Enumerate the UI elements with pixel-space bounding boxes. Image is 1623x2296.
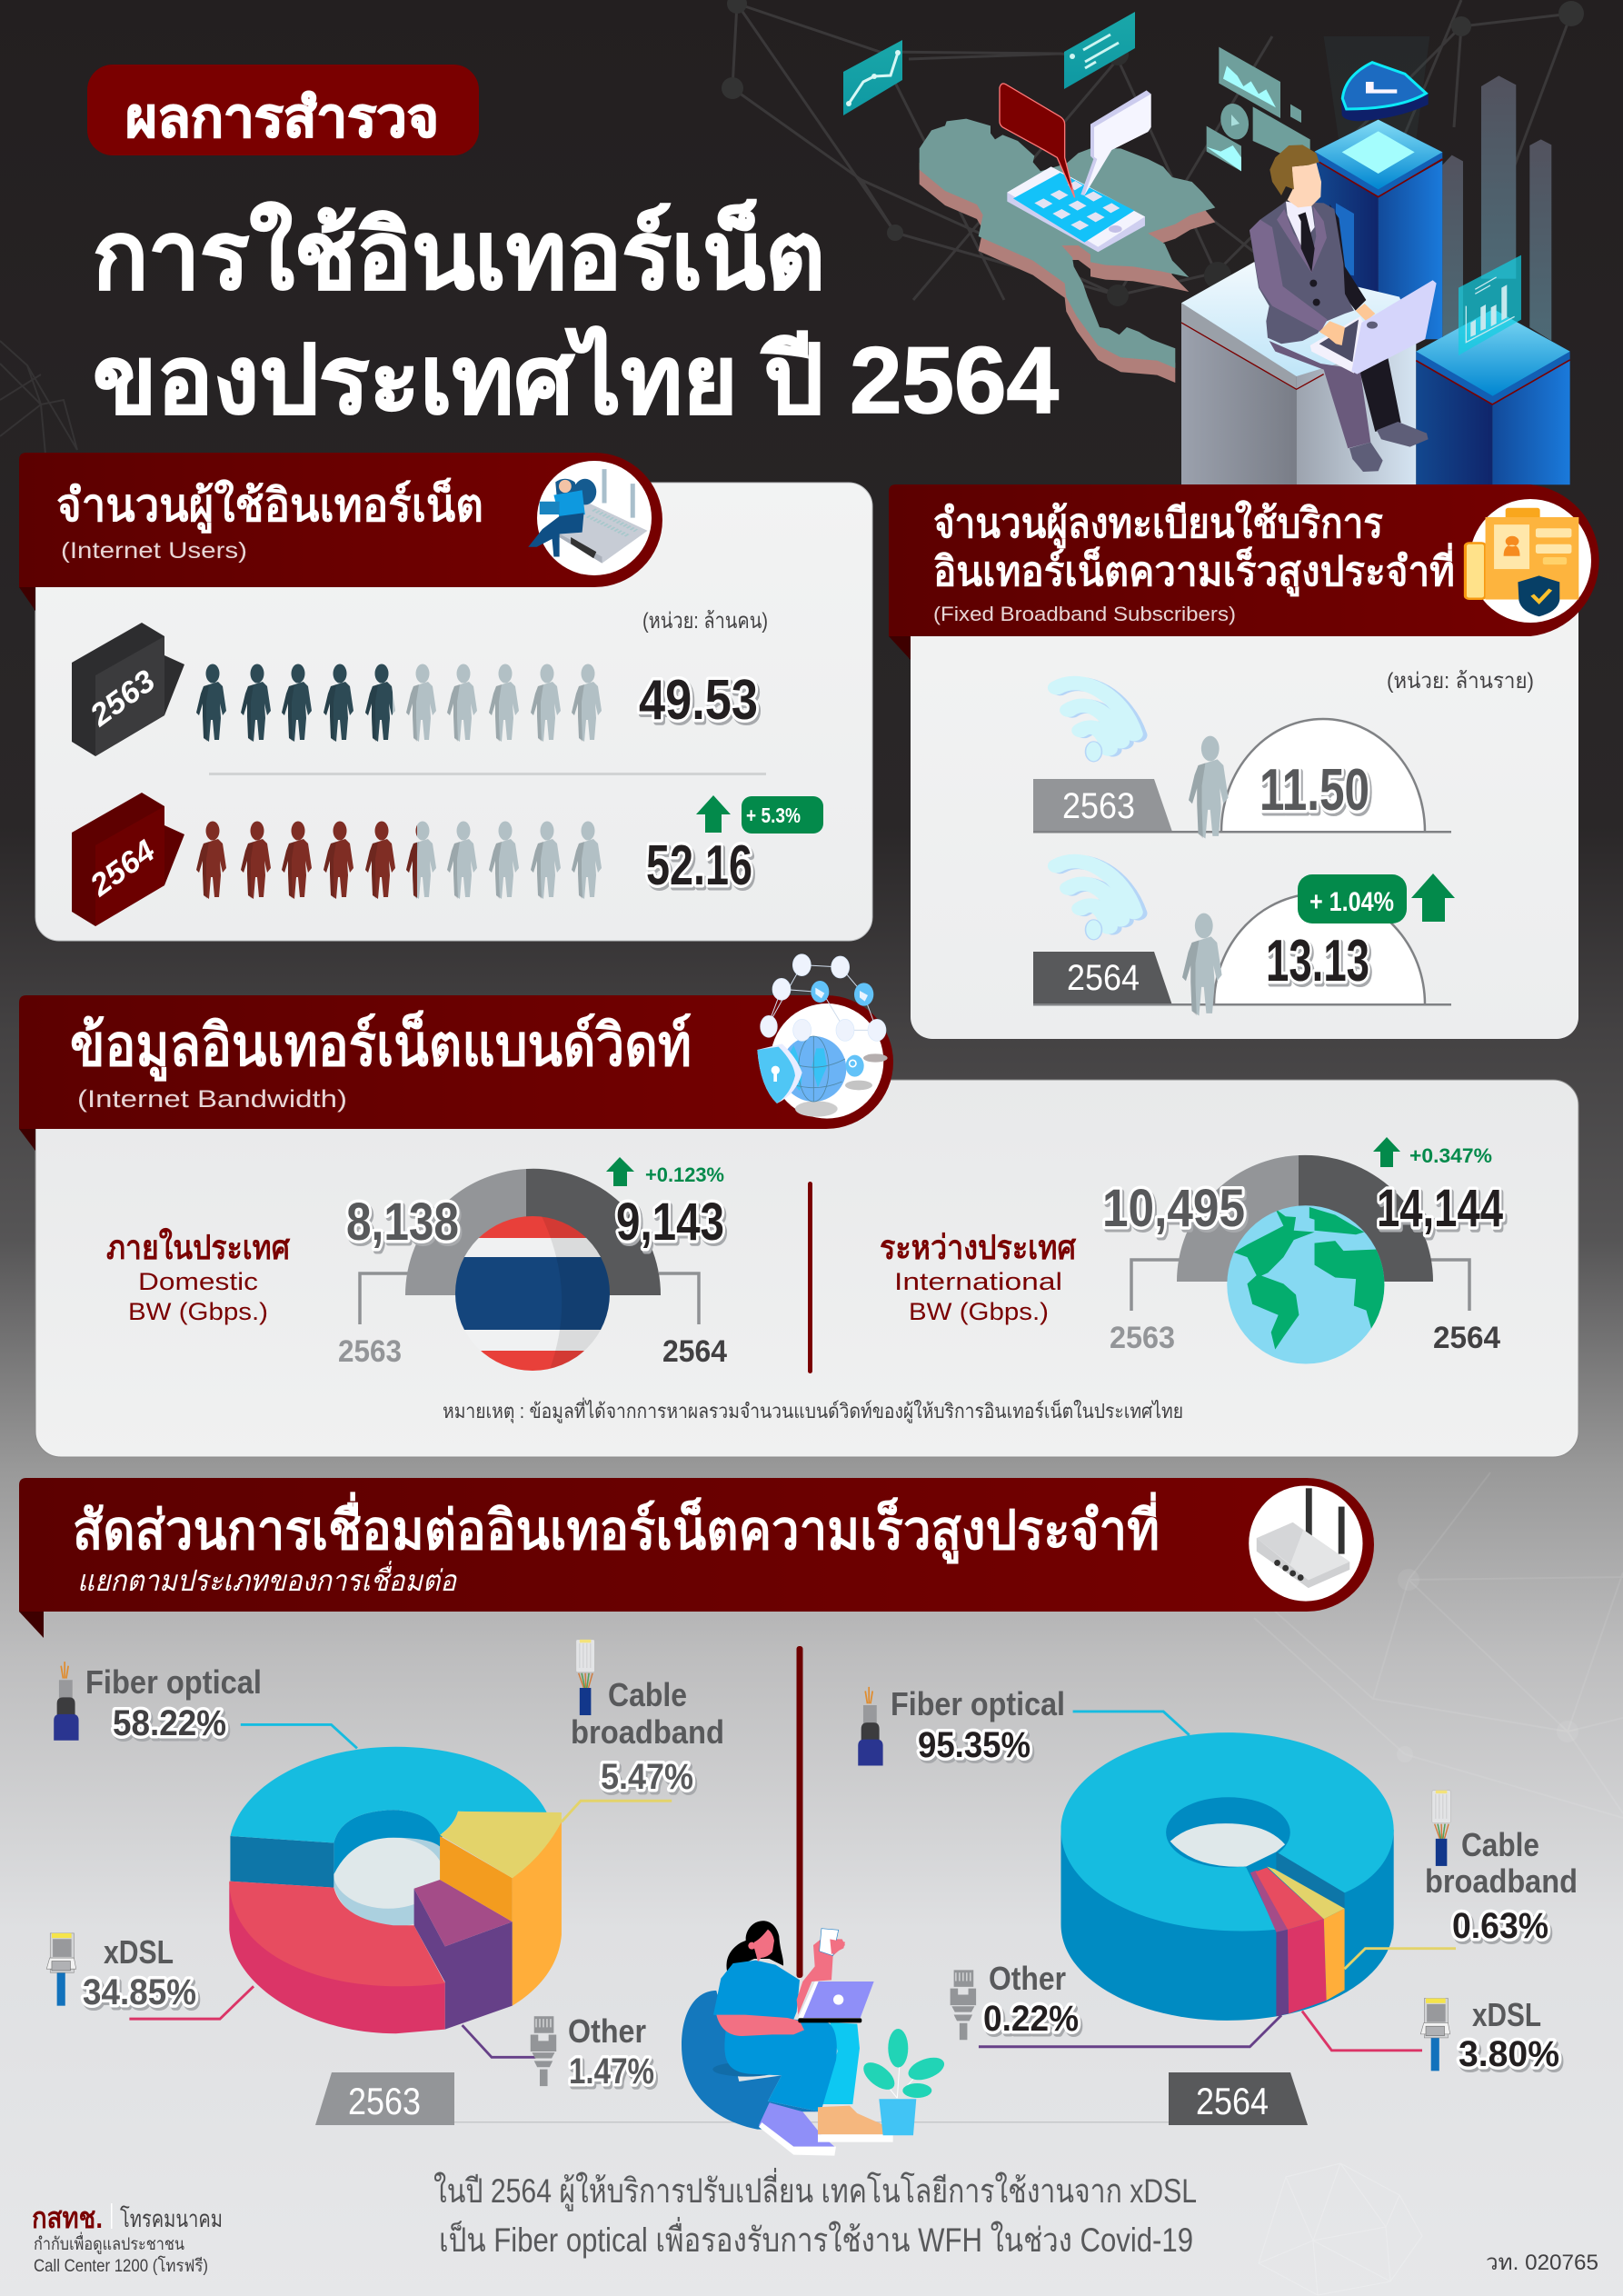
icon: floating text panel	[1064, 12, 1135, 89]
icon: floating media panels	[1207, 47, 1310, 171]
face	[754, 1930, 774, 1962]
year labels international	[1110, 1321, 1500, 1355]
slice: Fiber optical 58.22%	[230, 1747, 548, 1888]
icon: registration form	[1465, 499, 1591, 623]
label: other 2564: Other	[989, 1960, 1066, 1997]
label: other 2563	[531, 2012, 654, 2091]
year tag 2564: 2564	[1067, 958, 1140, 998]
ground line	[454, 2121, 1172, 2123]
label: fiber 2564: Fiber optical	[891, 1685, 1065, 1722]
torso and lap	[713, 1961, 837, 2111]
icon: earth globe	[1221, 1204, 1392, 1365]
label: fiber 2564	[858, 1685, 1065, 1766]
arrow up	[696, 795, 731, 833]
icon: smartphone	[1007, 166, 1145, 252]
value 14,144: 14,144	[1377, 1179, 1503, 1238]
year tag 2564	[1169, 2072, 1308, 2125]
network sphere: bottom right	[1259, 2163, 1422, 2295]
brackets international	[1131, 1260, 1469, 1311]
panel: internet users	[19, 453, 872, 941]
header ribbon: แยกตามประเภทของการเชื่อมต่อ	[77, 1561, 458, 1597]
slice: xDSL 3.80%	[1256, 1868, 1327, 2013]
label: cable 2563	[571, 1640, 724, 1797]
card	[35, 1080, 1578, 1457]
header ribbon: (Fixed Broadband Subscribers)	[933, 603, 1236, 625]
shoe right	[818, 2106, 893, 2134]
divider	[808, 1182, 812, 1373]
chart: 3D donut 2563	[229, 1747, 562, 2033]
slice: Cable broadband 0.63%	[1267, 1867, 1345, 2001]
label: cable 2564: broadband	[1425, 1862, 1578, 1900]
value 9,143: 9,143	[616, 1193, 724, 1252]
domestic label: ภายในประเทศ	[106, 1227, 290, 1266]
title: ของประเทศไทย ปี 2564	[93, 326, 1059, 434]
label: cable 2564	[1425, 1791, 1578, 1946]
label: xDSL 2563: xDSL	[104, 1933, 174, 1971]
label: cable 2563: 5.47%	[601, 1757, 693, 1797]
half dome 2564	[1214, 893, 1425, 1004]
brackets domestic	[360, 1273, 699, 1324]
icon: beanbag	[682, 1991, 821, 2130]
woman with laptop illustration	[682, 1921, 947, 2156]
badge: survey results	[87, 65, 479, 155]
label: cable 2564: 0.63%	[1452, 1906, 1548, 1946]
year labels international: 2564	[1433, 1321, 1500, 1355]
badge: survey results: ผลการสำรวจ	[125, 87, 439, 148]
year tag 2563	[315, 2072, 454, 2125]
value 2563: 49.53	[639, 669, 758, 732]
label: other 2564: 0.22%	[983, 1999, 1079, 2039]
year block 2564	[72, 793, 184, 926]
year labels domestic: 2564	[662, 1334, 727, 1369]
laptop	[798, 1982, 874, 2018]
icon: wifi 2563	[1057, 684, 1138, 762]
logo: NBTC: กสทช.	[32, 2201, 103, 2234]
label: cable 2563: Cable	[608, 1676, 687, 1713]
header ribbon	[19, 453, 662, 587]
white platform	[1181, 262, 1416, 484]
icon: white speech bubble	[1080, 90, 1151, 195]
panel: internet bandwidth	[19, 954, 1578, 1457]
ribbon fold	[19, 1129, 35, 1151]
value 8,138: 8,138	[346, 1193, 459, 1252]
hole	[1166, 1797, 1290, 1868]
header ribbon: จำนวนผู้ใช้อินเทอร์เน็ต	[56, 477, 483, 534]
header ribbon: (Internet Users)	[61, 538, 247, 564]
badge +1.04%	[1298, 874, 1407, 923]
plant	[879, 2099, 916, 2135]
label: fiber 2563: 58.22%	[113, 1703, 226, 1743]
header ribbon: อินเทอร์เน็ตความเร็วสูงประจำที่	[933, 543, 1455, 597]
unit label: (หน่วย: ล้านราย)	[1387, 669, 1534, 694]
card	[35, 483, 872, 941]
year labels international: 2563	[1110, 1321, 1175, 1355]
label: xDSL 2564: xDSL	[1472, 1996, 1541, 2033]
icon: shield	[1324, 36, 1429, 152]
label: xDSL 2564	[1420, 1996, 1559, 2074]
pictogram row 2563: 4.95 of 10	[196, 664, 602, 742]
year block 2564: 2564	[84, 834, 162, 903]
year tag 2564	[1033, 952, 1172, 1005]
divider	[209, 773, 766, 775]
half dome chart international	[1177, 1155, 1433, 1282]
conclusion text	[433, 2167, 1197, 2259]
year block 2563: 2563	[84, 664, 162, 734]
domestic label: BW (Gbps.)	[128, 1298, 268, 1325]
businessman with laptop	[1250, 145, 1437, 472]
label: cable 2564: Cable	[1461, 1826, 1539, 1863]
network background: lower right	[1254, 1472, 1623, 1818]
year tag 2563	[1033, 779, 1172, 832]
icon: woman on router	[528, 461, 652, 575]
domestic label	[106, 1227, 290, 1325]
logo: NBTC: โทรคมนาคม	[120, 2205, 223, 2232]
card	[911, 582, 1578, 1039]
slice: Other 1.47%	[414, 1880, 513, 2030]
pictogram row 2564: 5.2 of 10	[196, 822, 602, 899]
title: การใช้อินเทอร์เน็ต	[93, 198, 825, 309]
domestic label: Domestic	[138, 1268, 258, 1295]
phone	[820, 1929, 839, 1956]
network background: top right	[722, 0, 1584, 336]
label: fiber 2564: 95.35%	[918, 1725, 1031, 1765]
label: fiber 2563: Fiber optical	[85, 1663, 262, 1701]
arrow up	[606, 1157, 634, 1186]
ribbon fold	[19, 587, 35, 611]
divider	[796, 1646, 803, 1978]
half dome chart domestic	[405, 1169, 661, 1295]
year tag 2563: 2563	[1062, 786, 1135, 826]
year tag 2563: 2563	[348, 2080, 421, 2122]
label: xDSL 2563	[46, 1933, 196, 2012]
ribbon fold	[19, 1612, 44, 1638]
logo: NBTC	[32, 2201, 223, 2276]
badge +1.04%: + 1.04%	[1309, 887, 1394, 917]
title	[93, 198, 1059, 434]
leader lines 2563	[129, 1724, 672, 2057]
value 10,495: 10,495	[1102, 1179, 1245, 1238]
icon: floating chart panel	[843, 40, 902, 115]
icon: red speech bubble	[1000, 84, 1075, 197]
logo: NBTC: Call Center 1200 (โทรฟรี)	[34, 2255, 208, 2276]
baseline 2563	[1033, 831, 1451, 833]
header ribbon: (Internet Bandwidth)	[77, 1085, 347, 1113]
panel: connection type share	[19, 1478, 1578, 2156]
person icon 2563	[1189, 736, 1229, 839]
outer wall	[1060, 1830, 1394, 2021]
leader lines 2564	[979, 1712, 1456, 2051]
icon: hologram chart	[1459, 255, 1521, 355]
year tag 2564: 2564	[1196, 2080, 1269, 2122]
change +0.347%: +0.347%	[1409, 1144, 1492, 1167]
header ribbon	[19, 995, 893, 1129]
panel: fixed broadband subscribers	[889, 484, 1599, 1039]
international label: BW (Gbps.)	[909, 1298, 1049, 1325]
cut face	[1276, 1852, 1345, 1910]
arms	[716, 2015, 804, 2036]
value 13.13: 13.13	[1266, 927, 1369, 993]
label: xDSL 2564: 3.80%	[1459, 2034, 1559, 2074]
arrow up	[1373, 1137, 1400, 1167]
conclusion text: ในปี 2564 ผู้ให้บริการปรับเปลี่ยน เทคโนโลยีการใช้งานจาก xDSL	[433, 2167, 1197, 2211]
top surface: Fiber optical 95.35%	[1060, 1732, 1394, 1931]
badge +5.3%: + 5.3%	[746, 804, 801, 827]
icon: Thai flag	[455, 1216, 618, 1372]
year block 2563	[72, 623, 184, 756]
network background: left	[0, 341, 77, 454]
arrow up	[1411, 873, 1455, 922]
header ribbon	[19, 1478, 1374, 1612]
label: other 2563: 1.47%	[569, 2051, 654, 2091]
unit label: (หน่วย: ล้านคน)	[642, 609, 768, 634]
person icon 2564	[1182, 913, 1222, 1016]
document code: วท. 020765	[1486, 2251, 1598, 2275]
slice: Other 0.22%	[1250, 1871, 1289, 2016]
slice: xDSL 34.85%	[229, 1882, 445, 2033]
logo: NBTC: กำกับเพื่อดูแลประชาชน	[34, 2231, 184, 2254]
hero illustration	[843, 12, 1570, 484]
year labels domestic	[338, 1334, 727, 1369]
international label	[880, 1229, 1076, 1325]
header ribbon: ข้อมูลอินเทอร์เน็ตแบนด์วิดท์	[70, 1011, 692, 1082]
change +0.123%: +0.123%	[645, 1163, 724, 1186]
label: fiber 2563	[54, 1662, 262, 1743]
blue platform	[1416, 309, 1570, 484]
header ribbon: สัดส่วนการเชื่อมต่ออินเทอร์เน็ตความเร็วสูงประจำที่	[73, 1492, 1160, 1564]
icon: router	[1249, 1485, 1363, 1602]
year labels domestic: 2563	[338, 1334, 402, 1369]
ribbon fold	[889, 636, 911, 660]
label: cable 2563: broadband	[571, 1713, 724, 1751]
baseline 2564	[1033, 1003, 1451, 1005]
legs	[822, 2022, 860, 2104]
hair	[726, 1921, 783, 1971]
header ribbon: จำนวนผู้ลงทะเบียนใช้บริการ	[933, 499, 1383, 549]
floor of hole	[333, 1822, 454, 1927]
value 11.50: 11.50	[1260, 756, 1369, 823]
footnote: หมายเหตุ : ข้อมูลที่ได้จากการหาผลรวมจำนวนแบนด์วิดท์ของผู้ให้บริการอินเทอร์เน็ตในประเทศไทย	[443, 1397, 1183, 1423]
label: xDSL 2563: 34.85%	[83, 1972, 196, 2012]
international label: International	[894, 1268, 1062, 1295]
international label: ระหว่างประเทศ	[880, 1229, 1076, 1266]
half dome 2563	[1221, 719, 1425, 832]
icon: connected globe and shield	[757, 954, 888, 1119]
towers and platforms	[1181, 36, 1570, 484]
label: other 2563: Other	[568, 2012, 646, 2050]
label: other 2564	[951, 1960, 1079, 2040]
badge +5.3%	[742, 796, 823, 834]
slice: Cable broadband 5.47%	[440, 1812, 562, 2006]
chart: 3D donut 2564	[1060, 1732, 1394, 2021]
map of Thailand	[920, 84, 1215, 383]
grey towers	[1442, 75, 1551, 341]
header ribbon	[889, 484, 1599, 636]
shoe left	[759, 2102, 834, 2147]
icon: wifi 2564	[1057, 862, 1138, 940]
blue tower	[1315, 120, 1442, 339]
conclusion text: เป็น Fiber optical เพื่อรองรับการใช้งาน WFH ในช่วง Covid-19	[439, 2216, 1193, 2259]
value 2564: 52.16	[646, 834, 752, 897]
